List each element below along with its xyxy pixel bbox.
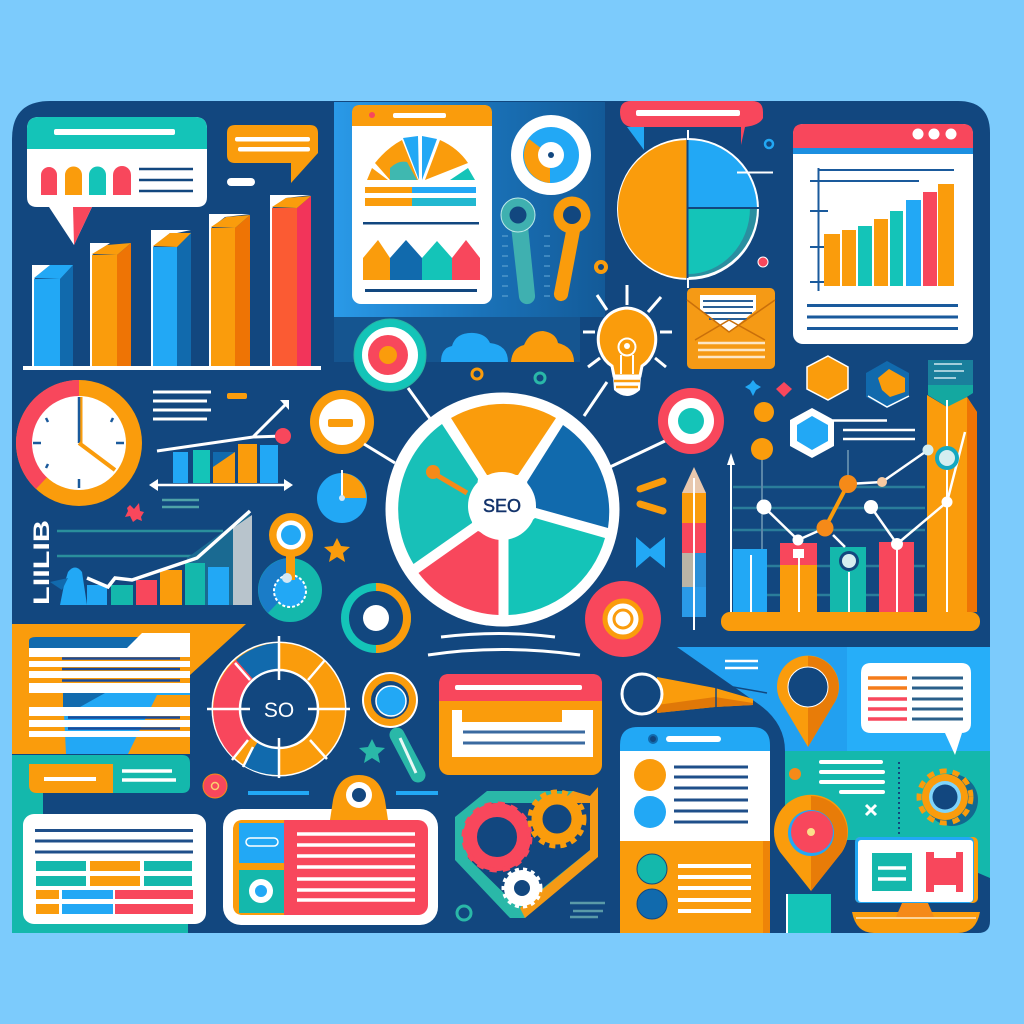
bar chart: 3D bars — [23, 195, 321, 370]
icon: gears heart — [455, 787, 605, 920]
chart: area growth chart — [29, 503, 252, 605]
speech bubble: right white — [861, 663, 971, 755]
pie icon small — [317, 470, 367, 523]
mini line and bar chart — [149, 400, 293, 507]
icon: magnifier key — [258, 513, 350, 622]
cloud band — [334, 317, 580, 362]
icon: lightbulb with rays — [583, 285, 672, 396]
icon: orange megaphone pipe — [622, 674, 767, 714]
wave lines under wheel — [428, 634, 580, 655]
rotated chart label: LIILIB — [29, 520, 54, 605]
top blue panel — [334, 102, 605, 317]
SEO label: SEO — [483, 496, 521, 516]
orange column with flag — [927, 360, 977, 612]
pie chart: SEO wheel — [386, 392, 620, 626]
SO label: SO — [264, 699, 294, 722]
icon: ring target — [354, 319, 426, 391]
icon: target dial — [511, 115, 591, 195]
panel: orange left card — [12, 624, 246, 754]
icon: magnifying glass — [359, 672, 418, 775]
donut icon — [341, 583, 411, 653]
icon: clock — [16, 380, 142, 506]
connector lines — [364, 382, 665, 467]
panel: bottom-left table card — [23, 814, 206, 933]
panel: red and orange web card — [439, 674, 602, 775]
small orange speech bubble — [227, 125, 318, 186]
icon: orbit target — [585, 581, 661, 657]
text lines beside clock — [153, 392, 247, 419]
panel: blue region lower right — [677, 647, 990, 751]
icon: minus badge — [310, 390, 374, 454]
donut chart: SO — [207, 636, 350, 778]
icon: monitor — [852, 837, 980, 933]
icon: envelope — [687, 288, 775, 369]
icon: map pin red — [774, 795, 848, 891]
red ribbon banner — [620, 101, 763, 150]
icon: map pin orange — [777, 656, 839, 747]
panel: browser chart card — [793, 124, 973, 344]
hexagon icons — [745, 356, 915, 458]
small red dot and blue dashes — [203, 774, 438, 798]
panel: clipboard card — [223, 775, 438, 925]
panel: phone card — [620, 727, 770, 933]
icon: pencil — [636, 467, 706, 630]
cloud icons — [441, 331, 574, 383]
text lines and gear — [789, 762, 978, 837]
panel: teal region lower right — [785, 751, 990, 933]
teal button bar — [12, 755, 190, 933]
icon: teal and orange key shapes — [501, 196, 608, 304]
chart: large line and bar chart — [721, 400, 980, 631]
panel: top dashboard card — [352, 105, 492, 304]
pie chart: quadrant — [617, 130, 773, 288]
panel: top-left speech card — [27, 117, 207, 245]
main navy panel — [12, 101, 990, 933]
icon: ring badge right — [658, 388, 724, 454]
